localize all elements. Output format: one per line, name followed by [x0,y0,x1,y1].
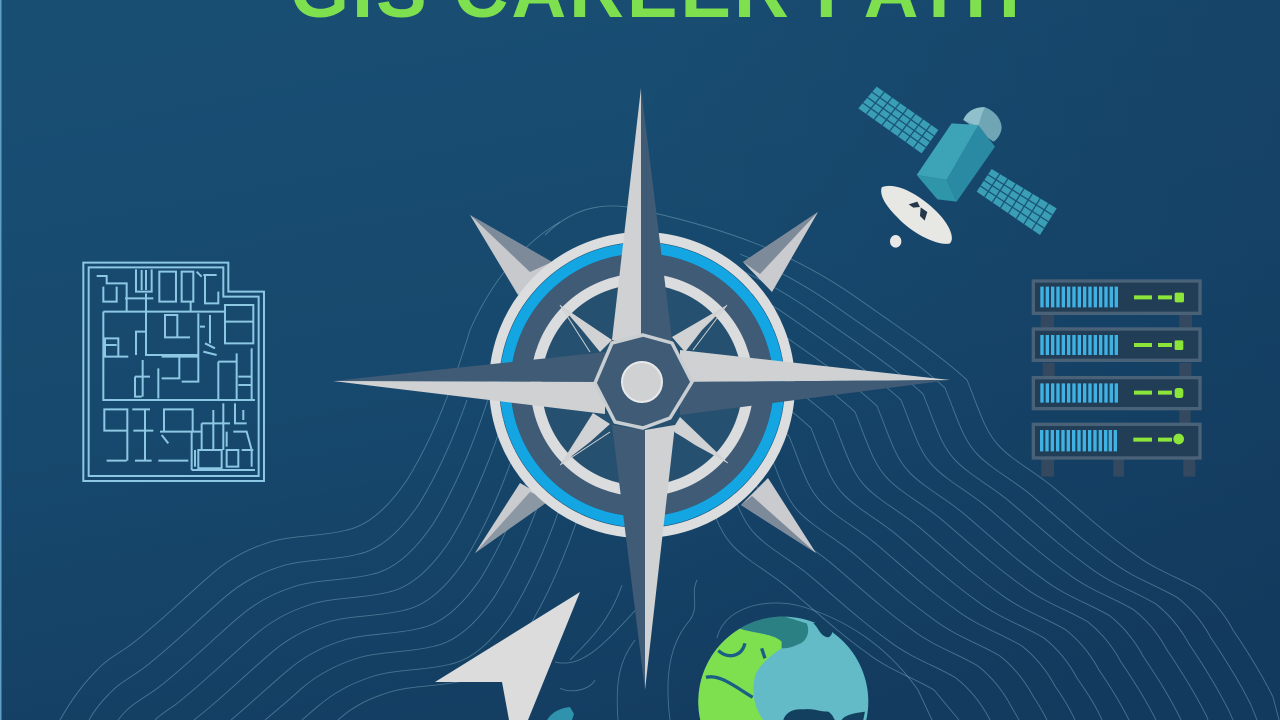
small teal shape [547,707,574,720]
globe land dark teal [740,617,808,648]
server unit 3 [1033,378,1200,409]
contour lines [60,206,1279,720]
icon: navigation arrow [435,592,580,720]
icon: server rack [1033,281,1200,477]
cardinal points [333,88,950,690]
solar panel left [858,87,938,153]
diagonal outer spikes [470,212,818,553]
icon: satellite [858,87,1057,248]
icon: globe [698,617,868,720]
compass rings [494,237,790,533]
solar panel right [977,169,1057,235]
server unit 4 [1033,424,1200,458]
coastline notches [783,623,865,720]
satellite body [917,123,995,202]
server unit 2 [1033,329,1200,360]
globe base light teal [698,617,868,720]
compass rose [333,88,950,690]
globe land green [698,629,782,720]
satellite dish [881,186,952,248]
icon: floor plan blueprint [83,263,264,481]
ocean channels [706,643,765,697]
server unit 1 [1033,281,1200,313]
inner diagonal star [560,305,728,465]
hexagonal hub [595,335,692,428]
satellite sensor cap [963,107,1002,142]
rack feet [1041,315,1195,477]
